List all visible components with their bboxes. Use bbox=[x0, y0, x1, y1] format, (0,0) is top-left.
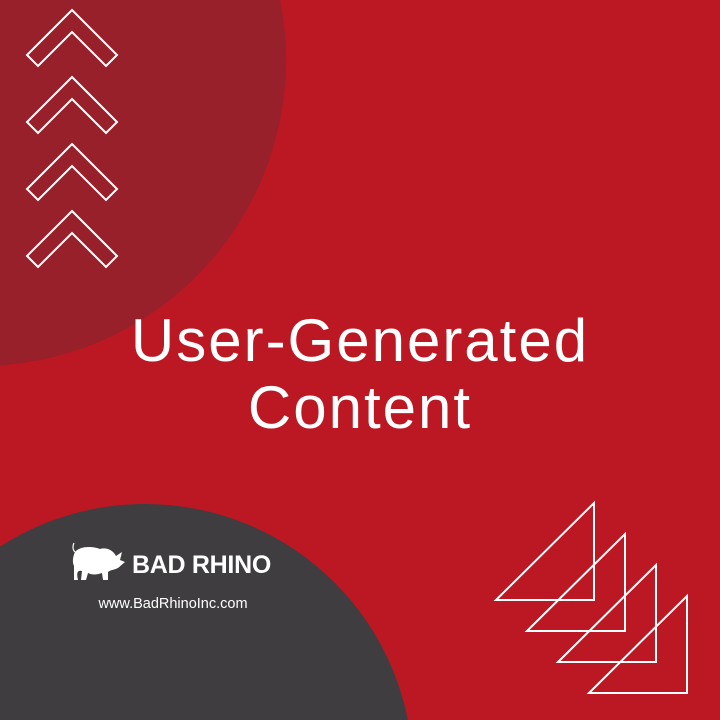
icon: triangles bbox=[496, 503, 687, 693]
icon: chevrons bbox=[27, 10, 117, 267]
dark red circle top-left bbox=[0, 0, 286, 366]
title bbox=[131, 307, 589, 441]
icon: rhino bbox=[73, 543, 125, 580]
url: www.BadRhinoInc.com bbox=[98, 596, 248, 612]
title: User-Generated bbox=[131, 307, 589, 374]
dark gray circle bottom-left bbox=[0, 504, 413, 720]
logo text: BAD RHINO bbox=[132, 551, 271, 579]
title: Content bbox=[248, 374, 472, 441]
